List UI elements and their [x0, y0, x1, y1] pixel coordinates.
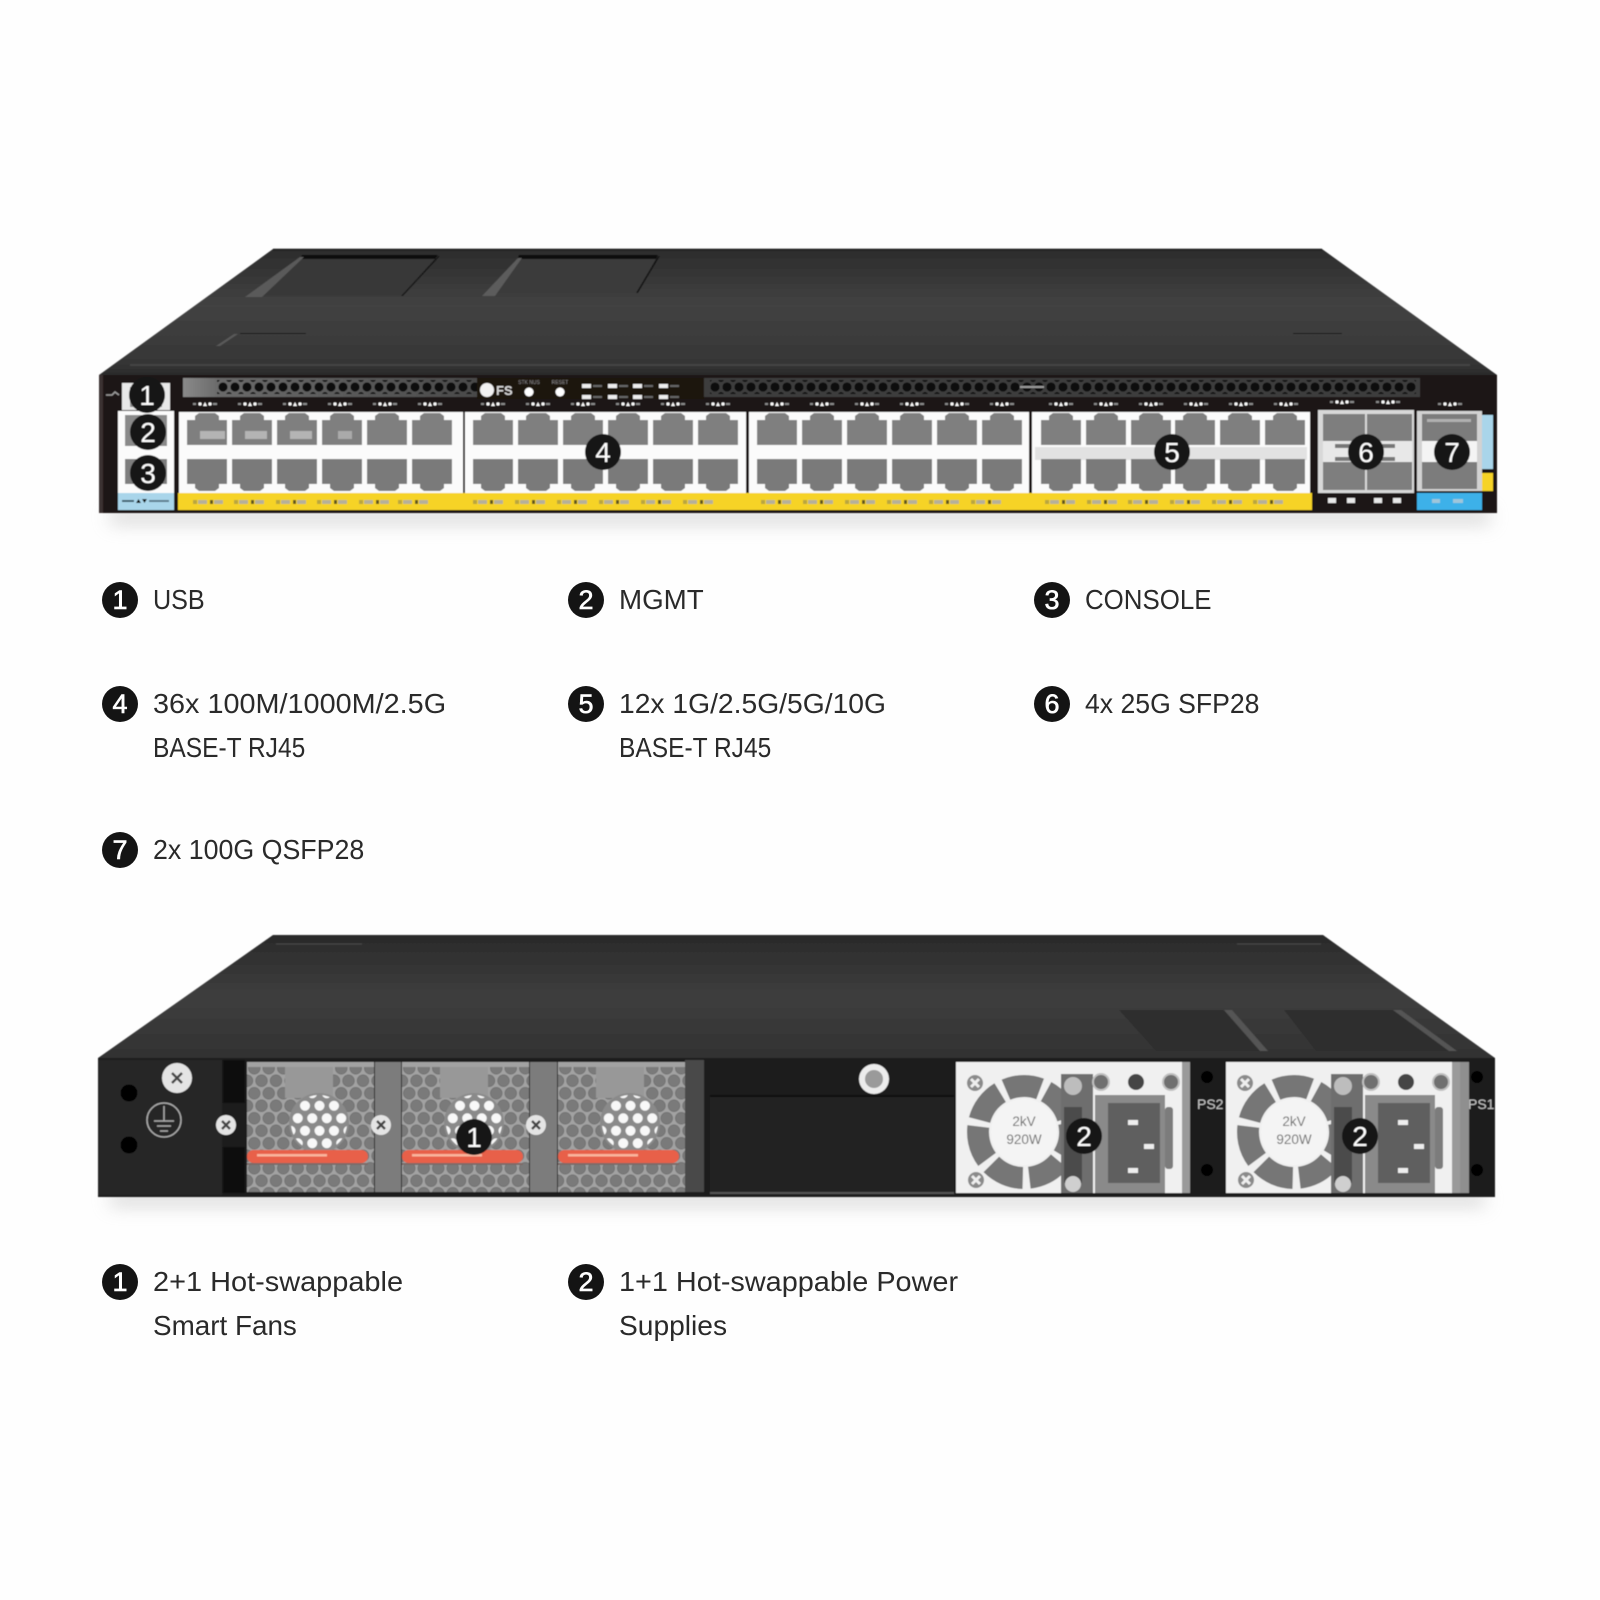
- fan slot left strip: [216, 1060, 245, 1193]
- USB port: [122, 383, 170, 410]
- legend: SFP28: 4x 25G SFP28: [1085, 688, 1259, 719]
- front view of switch: [99, 249, 1497, 513]
- RJ45 port block 3: [749, 412, 1029, 493]
- rear callout 2 right: [1342, 1118, 1378, 1154]
- PS2 slot label: PS2: [1197, 1096, 1224, 1112]
- yellow label strip: [178, 493, 1312, 510]
- fan module 3: [558, 1062, 685, 1192]
- rear callout 1: [456, 1119, 492, 1155]
- fan module 1: [247, 1062, 374, 1192]
- callout 1: 1: [139, 380, 155, 411]
- legend: hot-swappable fans: [102, 1264, 403, 1341]
- callout 6: [1348, 434, 1384, 470]
- rear view of switch: [98, 935, 1495, 1197]
- legend: hot-swappable power supplies: 1+1 Hot-swappable Power: [619, 1266, 958, 1297]
- legend: 36x RJ45: 4: [112, 689, 128, 719]
- grounding ear: [98, 1060, 222, 1195]
- callout 5: 5: [1164, 437, 1180, 468]
- PS1 slot label: [1460, 1062, 1495, 1193]
- legend: hot-swappable power supplies: 2: [578, 1267, 594, 1297]
- top cover (rear view): [98, 935, 1495, 1058]
- PS2 slot label: [1197, 1071, 1224, 1176]
- legend: 12x RJ45: BASE-T RJ45: [619, 732, 771, 763]
- QSFP label and side labels: [1417, 415, 1493, 510]
- callout 4: [585, 434, 621, 470]
- callout 3: 3: [140, 458, 156, 489]
- legend: 12x RJ45: 12x 1G/2.5G/5G/10G: [619, 688, 886, 719]
- rear callout 2 right: 2: [1352, 1121, 1368, 1152]
- FS logo and buttons: STK NUS: [518, 380, 540, 386]
- chassis shadows: [110, 510, 1490, 1206]
- rear callout 2 left: 2: [1076, 1121, 1092, 1152]
- legend: USB: [102, 582, 205, 618]
- legend: 36x RJ45: BASE-T RJ45: [153, 732, 305, 763]
- legend: USB: USB: [153, 584, 205, 615]
- legend: hot-swappable power supplies: [568, 1264, 958, 1341]
- legend: 12x RJ45: [568, 686, 886, 763]
- FS logo and buttons: RESET: [552, 380, 568, 386]
- port status marks: [193, 400, 1462, 406]
- FS logo and buttons: FS: [496, 383, 513, 398]
- left edge detail: [99, 375, 119, 513]
- callout 2: 2: [140, 417, 156, 448]
- QSFP28 ports: [1417, 411, 1482, 491]
- legend: QSFP28: 7: [112, 835, 128, 865]
- legend: 36x RJ45: 36x 100M/1000M/2.5G: [153, 688, 446, 719]
- legend: MGMT: 2: [578, 585, 594, 615]
- right vent strip: [704, 378, 1420, 397]
- callout 4: 4: [595, 437, 611, 468]
- fan module 2: [402, 1062, 529, 1192]
- legend: SFP28: [1034, 686, 1259, 722]
- legend: hot-swappable fans: Smart Fans: [153, 1310, 297, 1341]
- top cover (front view): [99, 249, 1497, 375]
- power supply 2: [1226, 1062, 1460, 1193]
- MGMT and CONSOLE ports: [118, 411, 174, 493]
- left vent strip: [183, 378, 479, 397]
- callout 7: 7: [1444, 437, 1460, 468]
- legend: CONSOLE: [1034, 582, 1212, 618]
- FS logo and buttons: [477, 378, 704, 399]
- rear callout 1: 1: [466, 1122, 482, 1153]
- callout 2: [130, 414, 166, 450]
- legend: SFP28: 6: [1044, 689, 1060, 719]
- power supply 1: [956, 1062, 1190, 1193]
- status LEDs: [582, 384, 679, 399]
- fan dividers and screws: [371, 1060, 704, 1192]
- callout 5: [1154, 434, 1190, 470]
- blank slot cover: [710, 1058, 954, 1195]
- rear panel: [98, 1058, 1495, 1197]
- RJ45 port block 1: [179, 412, 463, 493]
- PS1 slot label: PS1: [1468, 1096, 1495, 1112]
- legend: 36x RJ45: [102, 686, 446, 763]
- legend: CONSOLE: CONSOLE: [1085, 584, 1212, 615]
- callout 6: 6: [1358, 437, 1374, 468]
- legend: QSFP28: 2x 100G QSFP28: [153, 834, 364, 865]
- SFP28 ports: [1318, 410, 1414, 503]
- callout 7: [1434, 434, 1470, 470]
- RJ45 port block 2: [465, 412, 746, 493]
- callout 1: [129, 377, 165, 413]
- RJ45 port block 4: [1032, 412, 1310, 493]
- legend: CONSOLE: 3: [1044, 585, 1060, 615]
- blue label: [118, 493, 174, 510]
- legend: MGMT: [568, 582, 704, 618]
- front panel: [99, 375, 1497, 513]
- rear callout 2 left: [1066, 1118, 1102, 1154]
- legend: hot-swappable fans: 2+1 Hot-swappable: [153, 1266, 403, 1297]
- legend: 12x RJ45: 5: [578, 689, 594, 719]
- legend: hot-swappable power supplies: Supplies: [619, 1310, 727, 1341]
- legend: MGMT: MGMT: [619, 584, 704, 615]
- legend: hot-swappable fans: 1: [112, 1267, 128, 1297]
- callout 3: [130, 455, 166, 491]
- legend: QSFP28: [102, 832, 364, 868]
- legend: USB: 1: [112, 585, 128, 615]
